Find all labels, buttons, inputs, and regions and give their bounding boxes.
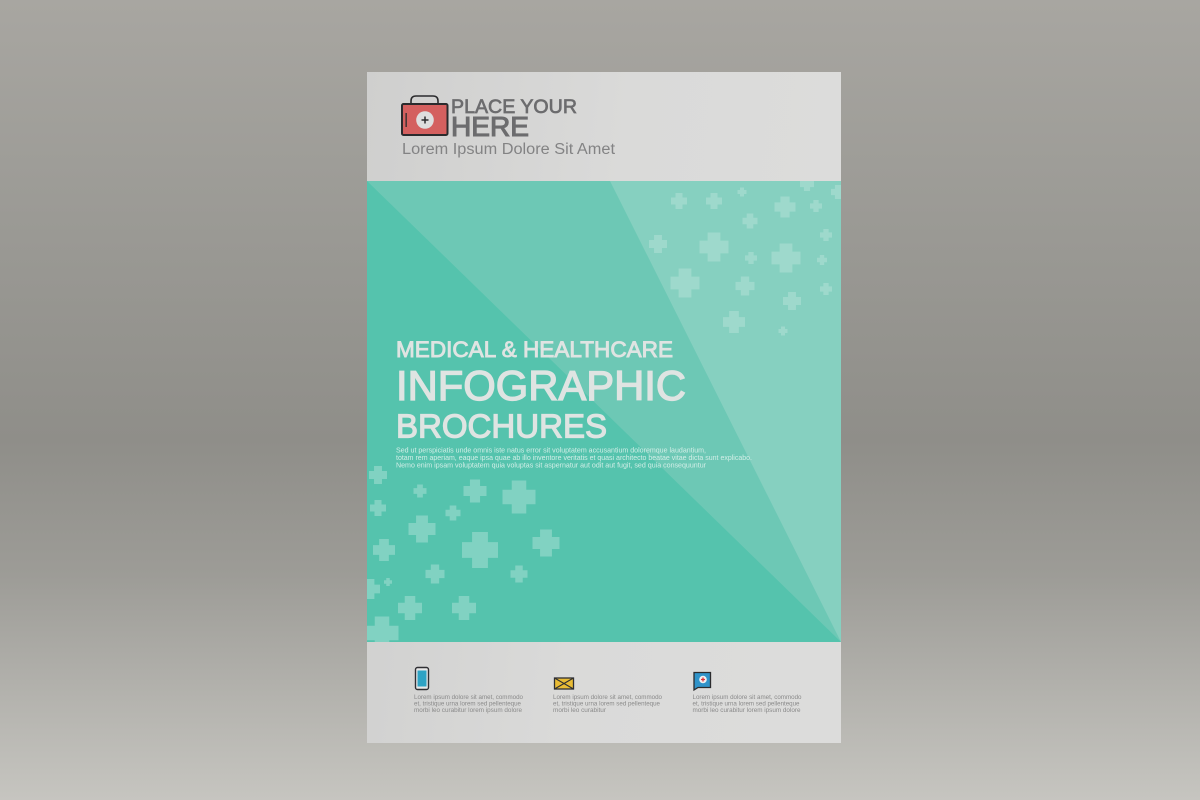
logo heading (451, 96, 577, 142)
footer text 2: morbi leo curabitur (553, 707, 607, 714)
title: INFOGRAPHIC (396, 362, 686, 409)
icon: speech bubble (694, 672, 710, 690)
logo heading: PLACE YOUR (451, 96, 577, 118)
lighter wedge (610, 181, 841, 642)
panel: teal cover band (360, 177, 845, 650)
footer text 2 (553, 694, 662, 714)
footer text 3: et, tristique urna lorem sed pellenteque (692, 700, 800, 708)
title: MEDICAL & HEALTHCARE (396, 337, 673, 362)
footer text 3 (692, 694, 802, 714)
intro paragraph: totam rem aperiam, eaque ipsa quae ab illo inventore veritatis et quasi architecto beatae vitae dicta sunt explicabo. (396, 453, 752, 462)
footer text 2: Lorem ipsum dolore sit amet, commodo (553, 694, 662, 701)
intro paragraph: Nemo enim ipsam voluptatem quia voluptas sit aspernatur aut odit aut fugit, sed quia consequuntur (396, 460, 707, 470)
footer text 3: Lorem ipsum dolore sit amet, commodo (692, 694, 802, 701)
footer text 1: Lorem ipsum dolore sit amet, commodo (414, 694, 523, 701)
intro paragraph (396, 446, 752, 470)
crosses: bottom left (360, 466, 560, 650)
footer text 2: et, tristique urna lorem sed pellenteque (553, 700, 660, 708)
footer text 1 (414, 694, 523, 714)
icon: red medical case (402, 96, 448, 135)
logo tagline: Lorem Ipsum Dolore Sit Amet (402, 141, 616, 158)
title: BROCHURES (396, 408, 607, 446)
base teal (367, 181, 841, 642)
paper sheet (367, 72, 841, 743)
logo heading: HERE (451, 111, 529, 142)
crosses: top right (649, 177, 845, 336)
icon: phone (416, 668, 428, 690)
footer text 1: morbi leo curabitur lorem ipsum dolore (414, 707, 522, 714)
title (396, 337, 686, 446)
light wedge (367, 181, 841, 642)
intro paragraph: Sed ut perspiciatis unde omnis iste natus error sit voluptatem accusantium doloremque laudantium, (396, 446, 706, 454)
footer text 1: et, tristique urna lorem sed pellenteque (414, 700, 521, 708)
brochure page (360, 72, 845, 743)
footer text 3: morbi leo curabitur lorem ipsum dolore (692, 707, 801, 714)
icon: envelope (554, 678, 574, 689)
